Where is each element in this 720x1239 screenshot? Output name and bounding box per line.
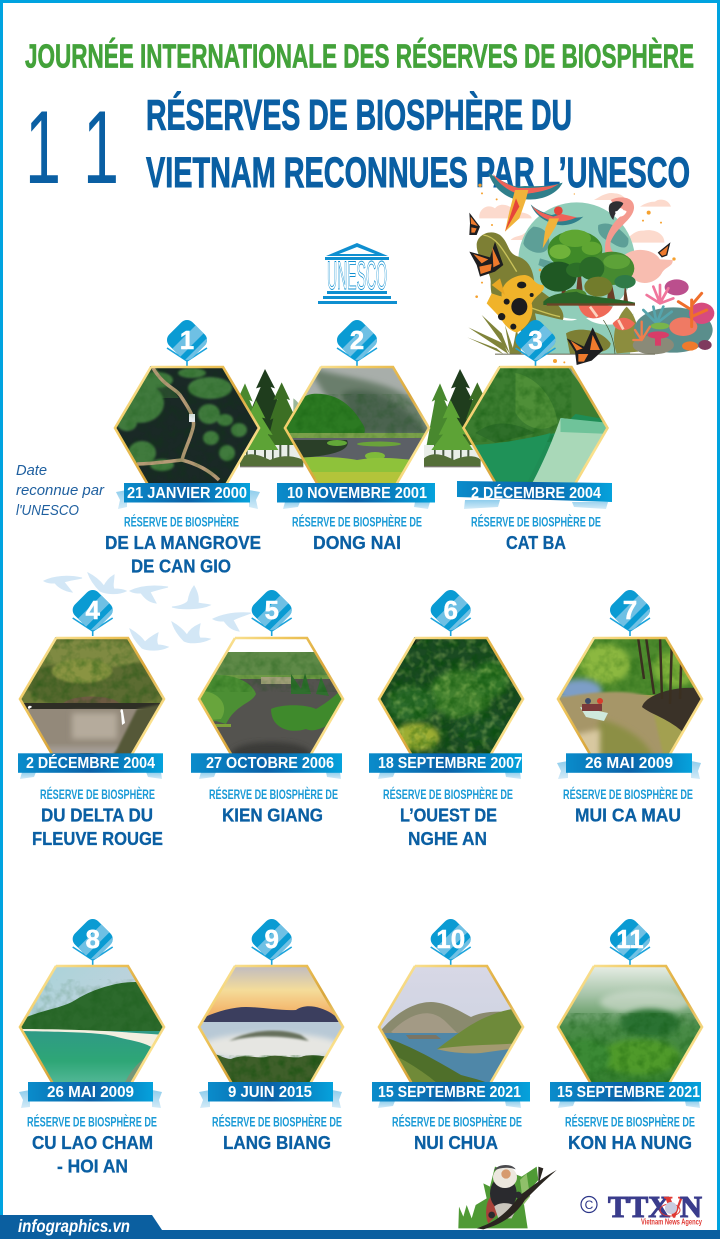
logo: TTXVN: TTX — [608, 1189, 671, 1224]
name 1: DE CAN GIO — [131, 556, 231, 577]
badge 1: 1 — [180, 325, 194, 355]
badge 6: 6 — [443, 595, 458, 625]
badge 1 — [166, 320, 208, 366]
photo 8 — [18, 963, 166, 1091]
logo: TTXVN: N — [680, 1189, 702, 1224]
name 7: MUI CA MAU — [575, 805, 681, 826]
big number 11 — [25, 90, 119, 206]
label 5: RÉSERVE DE BIOSPHÈRE DE — [209, 787, 338, 802]
label 4: RÉSERVE DE BIOSPHÈRE — [40, 787, 155, 802]
name 8: - HOI AN — [57, 1156, 128, 1177]
spiky leaves — [467, 315, 522, 354]
photo 6 — [377, 635, 525, 763]
photo 7 — [556, 635, 704, 763]
date ribbon 1: 21 JANVIER 2000 — [127, 485, 247, 502]
globe — [518, 202, 635, 319]
footer site name: infographics.vn — [18, 1216, 130, 1236]
text: date legend: l'UNESCO — [16, 502, 79, 519]
date ribbon 3 — [457, 481, 612, 509]
clouds — [479, 193, 671, 243]
date ribbon 2 — [277, 483, 435, 509]
badge 8 — [72, 919, 114, 965]
big number 11: 1 — [83, 90, 119, 206]
name 3: CAT BA — [506, 532, 566, 553]
trees — [540, 230, 636, 306]
badge 2: 2 — [350, 325, 364, 355]
olive leaf — [477, 232, 563, 334]
badge 11 — [610, 919, 650, 965]
label 9: RÉSERVE DE BIOSPHÈRE DE — [212, 1115, 342, 1130]
badge 7 — [610, 590, 650, 636]
badge 8: 8 — [85, 924, 100, 954]
badge 7: 7 — [623, 595, 637, 625]
name 1: DE LA MANGROVE — [105, 532, 261, 553]
date ribbon 4 — [18, 753, 163, 779]
photo 4 — [18, 636, 166, 754]
date ribbon 11: 15 SEPTEMBRE 2021 — [557, 1084, 700, 1101]
name 8: CU LAO CHAM — [32, 1132, 153, 1153]
name 11: KON HA NUNG — [568, 1132, 692, 1153]
badge 3: 3 — [528, 325, 543, 355]
name 6 — [400, 805, 497, 849]
text: date legend: reconnue par — [16, 482, 105, 499]
date ribbon 10: 15 SEPTEMBRE 2021 — [378, 1084, 521, 1101]
badge 9 — [251, 919, 292, 965]
label 3: RÉSERVE DE BIOSPHÈRE DE — [471, 515, 601, 530]
date ribbon 8: 26 MAI 2009 — [47, 1084, 134, 1101]
date ribbon 5 — [191, 753, 342, 779]
card 8: Cu Lao Cham — [18, 917, 166, 1177]
butterfly left large — [469, 242, 503, 277]
name 9: LANG BIANG — [223, 1132, 331, 1153]
date ribbon 7: 26 MAI 2009 — [585, 755, 673, 772]
badge 9: 9 — [264, 924, 279, 954]
butterfly right small — [659, 244, 669, 257]
card 3: Cat Ba — [457, 318, 612, 553]
date ribbon 3: 2 DÉCEMBRE 2004 — [471, 485, 601, 502]
label 1: RÉSERVE DE BIOSPHÈRE — [124, 515, 239, 530]
butterfly left small — [469, 213, 480, 235]
illustration: forest strip left — [232, 369, 305, 467]
name 5: KIEN GIANG — [222, 805, 323, 826]
photo 1 — [113, 364, 261, 492]
date ribbon 5: 27 OCTOBRE 2006 — [206, 755, 334, 772]
date ribbon 10 — [372, 1082, 530, 1108]
logo: TTXVN — [608, 1189, 702, 1226]
title: blue heading — [146, 92, 690, 197]
badge 3 — [515, 320, 556, 366]
butterfly bottom — [567, 327, 603, 365]
frog — [487, 275, 544, 333]
badge 10 — [430, 919, 472, 965]
label 2: RÉSERVE DE BIOSPHÈRE DE — [292, 515, 422, 530]
name 2: DONG NAI — [313, 532, 401, 553]
photo 9 — [197, 963, 345, 1091]
label 10: RÉSERVE DE BIOSPHÈRE DE — [392, 1115, 522, 1130]
badge 4: 4 — [85, 595, 100, 625]
photo 3 — [462, 364, 610, 492]
date ribbon 2: 10 NOVEMBRE 2001 — [287, 485, 427, 502]
date ribbon 6: 18 SEPTEMBRE 2007 — [378, 755, 522, 772]
photo 2 — [283, 364, 431, 492]
logo: TTXVN: V — [664, 1189, 685, 1224]
illustration: biodiversity collage — [467, 173, 714, 365]
photo 10 — [377, 963, 525, 1091]
orange dots — [475, 184, 676, 363]
footer bar — [0, 1215, 720, 1239]
card 6: Ouest de Nghe An — [369, 588, 525, 849]
birds flock — [44, 573, 251, 650]
card 11: Kon Ha Nung — [550, 917, 704, 1153]
date ribbon 9 — [199, 1082, 342, 1108]
date ribbon 6 — [369, 753, 522, 779]
date ribbon 7 — [557, 753, 701, 779]
text: date legend — [16, 462, 105, 519]
card 10: Nui Chua — [372, 917, 530, 1153]
icon: UNESCO temple logo — [318, 243, 397, 304]
parrot top — [488, 173, 563, 232]
baseline — [495, 354, 655, 355]
name 4: DU DELTA DU — [41, 805, 153, 826]
illustration: douc langur monkey — [458, 1165, 557, 1229]
copyright mark — [581, 1196, 597, 1212]
name 6: NGHE AN — [408, 828, 487, 849]
text: UNESCO — [327, 254, 387, 298]
date ribbon 1 — [116, 483, 260, 509]
parrot small — [531, 204, 583, 248]
name 4 — [32, 805, 163, 849]
card 4: Delta du Fleuve Rouge — [18, 588, 166, 849]
card 7: Mui Ca Mau — [556, 588, 704, 826]
badge 11: 11 — [616, 924, 644, 954]
badge 5: 5 — [264, 595, 279, 625]
card 9: Lang Biang — [197, 917, 345, 1153]
name 10: NUI CHUA — [414, 1132, 498, 1153]
name 8 — [32, 1132, 153, 1177]
label 6: RÉSERVE DE BIOSPHÈRE DE — [383, 787, 513, 802]
badge 10: 10 — [436, 924, 465, 954]
badge 5 — [251, 590, 292, 636]
badge 4 — [72, 590, 114, 636]
photo 5 — [198, 636, 344, 754]
card 2: Dong Nai — [277, 318, 435, 553]
date ribbon 8 — [19, 1082, 162, 1108]
name 4: FLEUVE ROUGE — [32, 828, 163, 849]
text: date legend: Date — [16, 462, 47, 479]
date ribbon 11 — [550, 1082, 701, 1108]
illustration: forest strip right — [424, 369, 497, 467]
label 8: RÉSERVE DE BIOSPHÈRE DE — [27, 1115, 157, 1130]
date ribbon 4: 2 DÉCEMBRE 2004 — [26, 755, 155, 772]
badge 6 — [430, 590, 472, 636]
date ribbon 9: 9 JUIN 2015 — [228, 1084, 312, 1101]
corals — [633, 279, 714, 354]
card 1: Can Gio — [105, 318, 261, 577]
name 6: L’OUEST DE — [400, 805, 497, 826]
copyright mark: C — [585, 1198, 594, 1212]
photo 11 — [556, 963, 704, 1091]
badge 2 — [336, 320, 378, 366]
big number 11: 1 — [25, 90, 61, 206]
name 1 — [105, 532, 261, 577]
card 5: Kien Giang — [191, 588, 345, 826]
flamingo — [605, 197, 673, 283]
lower foliage — [535, 304, 639, 354]
